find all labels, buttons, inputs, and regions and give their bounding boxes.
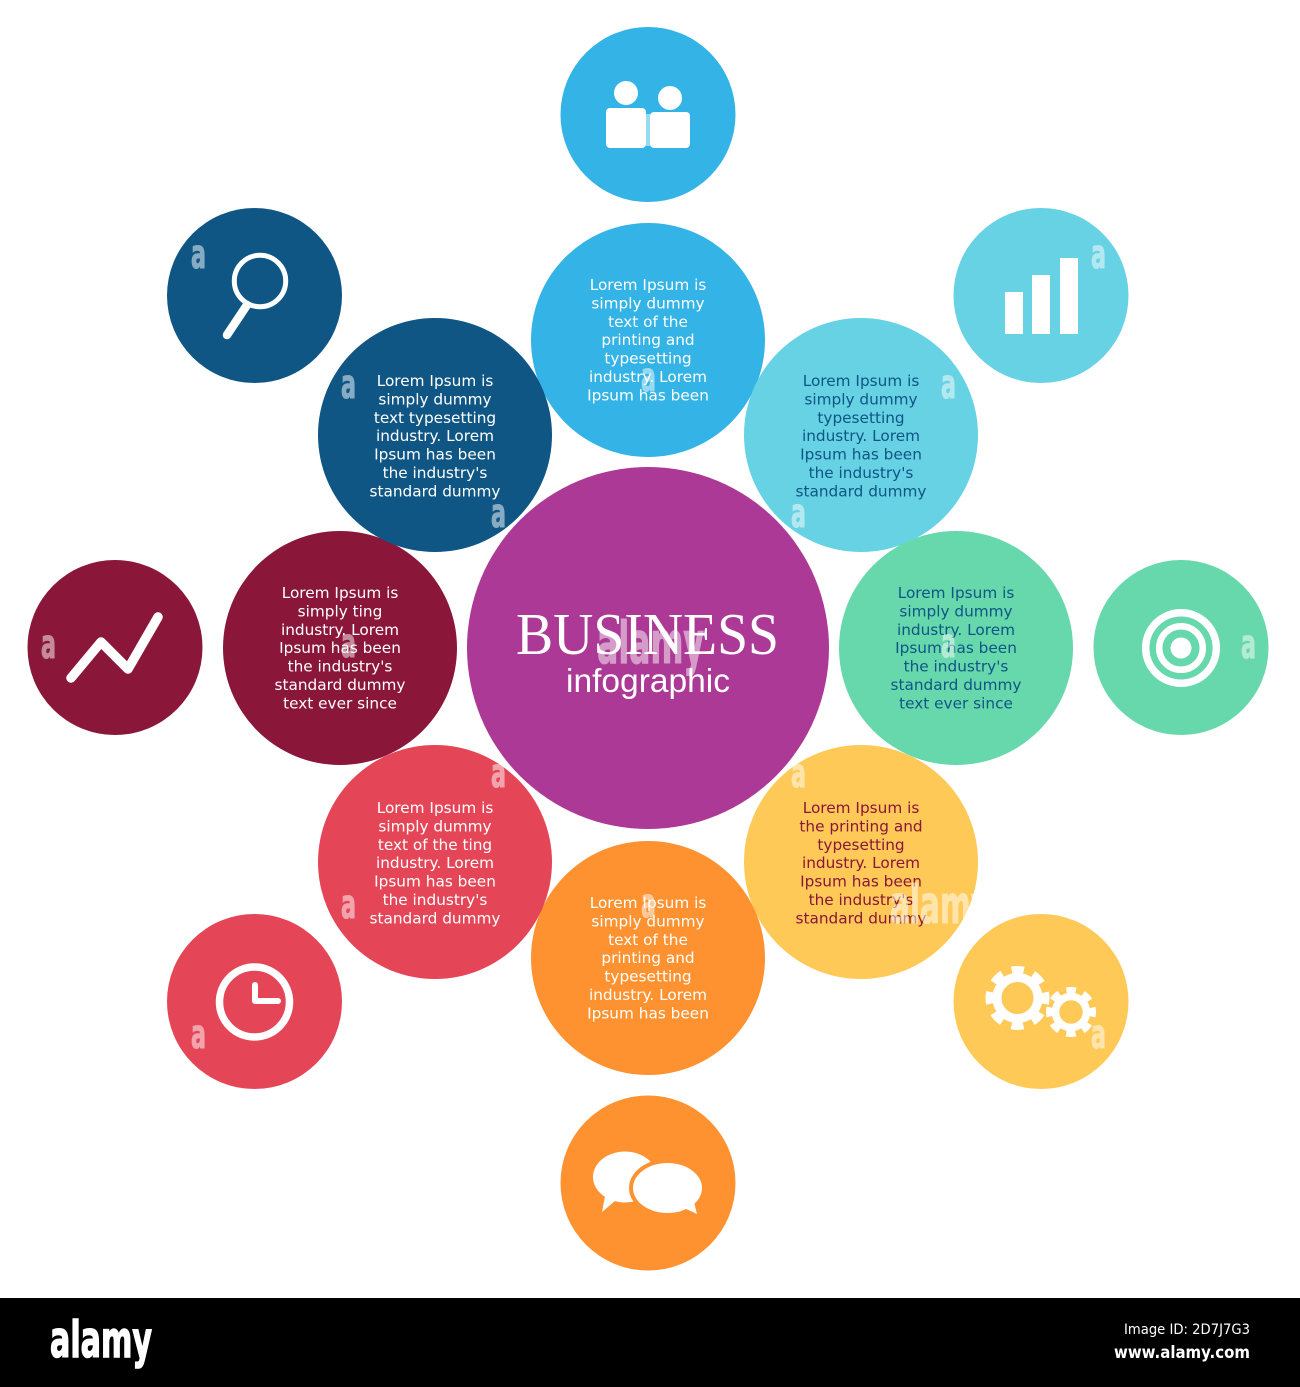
panel: left text circle: simply ting [298, 602, 382, 620]
panel: top-right text circle: typesetting [817, 409, 905, 427]
panel: bottom-right text circle: the printing and [799, 817, 923, 835]
icon: clock on red circle [167, 914, 342, 1089]
panel: right text circle: Ipsum has been [895, 639, 1017, 657]
panel: bottom-left text circle: Lorem Ipsum is [377, 799, 493, 817]
panel: bottom-left text circle: simply dummy [378, 817, 492, 835]
panel: bottom-right text circle: industry. Lorem [802, 854, 920, 872]
panel: top text circle: typesetting [604, 350, 692, 368]
footer band: www.alamy.com [1114, 1343, 1250, 1362]
watermark: alamy stamps: a [941, 621, 956, 667]
panel: central hub [467, 467, 829, 829]
icon: target on green circle [1094, 560, 1268, 735]
icon: chat bubbles on orange circle [560, 1096, 736, 1270]
footer band [0, 1298, 1300, 1387]
watermark: alamy stamps: a [791, 491, 806, 537]
panel: bottom text circle: industry. Lorem [589, 986, 707, 1004]
panel: right text circle: industry. Lorem [897, 621, 1015, 639]
panel: bottom-right text circle: Lorem Ipsum is [803, 799, 919, 817]
panel: bottom-left text circle: standard dummy [370, 909, 500, 927]
watermark: alamy stamps [41, 232, 1256, 1058]
panel: left text circle: text ever since [283, 694, 397, 712]
panel: bottom text circle: printing and [601, 949, 695, 967]
panel: bottom text circle: Lorem Ipsum is [590, 894, 706, 912]
watermark: alamy stamps: a [491, 751, 506, 797]
watermark: alamy stamps: alamy [890, 875, 990, 936]
panel: bottom-right text circle [744, 745, 978, 979]
panel: bottom-left text circle: text of the ting [378, 836, 492, 854]
panel: bottom text circle: simply dummy [591, 912, 705, 930]
panel: left text circle: industry. Lorem [281, 621, 399, 639]
panel: bottom text circle [531, 841, 765, 1075]
panel: bottom text circle: typesetting [604, 968, 692, 986]
panel: top text circle: text of the [608, 313, 688, 331]
watermark: alamy stamps: a [341, 882, 356, 928]
watermark: alamy stamps: a [191, 232, 206, 278]
icon: bar chart on cyan circle [954, 208, 1128, 383]
watermark: alamy stamps: a [491, 491, 506, 537]
watermark: alamy stamps: a [1091, 232, 1106, 278]
panel: top-right text circle: the industry's [809, 464, 913, 482]
watermark: alamy stamps: a [191, 1012, 206, 1058]
panel: left text circle: Ipsum has been [279, 639, 401, 657]
panel: bottom-left text circle [318, 745, 552, 979]
panel: central hub: infographic [566, 662, 730, 699]
footer band: alamy [50, 1311, 152, 1369]
panel: top-left text circle: standard dummy [370, 482, 500, 500]
panel: left text circle: standard dummy [275, 676, 405, 694]
panel: top text circle: simply dummy [591, 294, 705, 312]
panel: top-left text circle [318, 318, 552, 552]
panel: right text circle: simply dummy [899, 602, 1013, 620]
icon: magnifier on navy circle [167, 208, 342, 383]
panel: bottom-right text circle: the industry's [809, 891, 913, 909]
watermark: alamy stamps: a [791, 751, 806, 797]
panel: right text circle: Lorem Ipsum is [898, 584, 1014, 602]
panel: left text circle [223, 531, 457, 765]
watermark: alamy stamps: a [341, 362, 356, 408]
watermark: alamy stamps: a [1091, 1012, 1106, 1058]
panel: bottom-left text circle: industry. Lorem [376, 854, 494, 872]
watermark: alamy stamps: a [341, 621, 356, 667]
panel: top-left text circle: simply dummy [378, 390, 492, 408]
watermark: alamy stamps: a [641, 881, 656, 927]
panel: top-left text circle: text typesetting [374, 409, 496, 427]
panel: bottom-right text circle: typesetting [817, 836, 905, 854]
panel: central hub: BUSINESS [516, 601, 779, 667]
panel: bottom-right text circle: standard dummy [796, 909, 926, 927]
watermark: alamy stamps: alamy [597, 609, 704, 677]
panel: bottom text circle: Ipsum has been [587, 1004, 709, 1022]
watermark: alamy stamps: a [1241, 622, 1256, 668]
panel: top text circle: printing and [601, 331, 695, 349]
panel: top text circle [531, 223, 765, 457]
watermark: alamy stamps: a [641, 355, 656, 401]
panel: bottom-right text circle: Ipsum has been [800, 873, 922, 891]
panel: top-left text circle: Ipsum has been [374, 446, 496, 464]
icon: people on blue circle [560, 27, 736, 202]
panel: top text circle: Ipsum has been [587, 386, 709, 404]
icon: gears on yellow circle [954, 914, 1128, 1089]
panel: top-right text circle: standard dummy [796, 482, 926, 500]
panel: top-right text circle: simply dummy [804, 390, 918, 408]
panel: top text circle: industry. Lorem [589, 368, 707, 386]
panel: top-left text circle: industry. Lorem [376, 427, 494, 445]
footer band: Image ID: 2D7J7G3 [1124, 1322, 1250, 1338]
panel: bottom-left text circle: Ipsum has been [374, 873, 496, 891]
panel: top-right text circle: Lorem Ipsum is [803, 372, 919, 390]
panel: right text circle: the industry's [904, 658, 1008, 676]
panel: bottom text circle: text of the [608, 931, 688, 949]
panel: top-right text circle: Ipsum has been [800, 446, 922, 464]
panel: left text circle: the industry's [288, 658, 392, 676]
panel: top text circle: Lorem Ipsum is [590, 276, 706, 294]
panel: right text circle: standard dummy [891, 676, 1021, 694]
watermark: alamy stamps: a [41, 622, 56, 668]
panel: top-right text circle: industry. Lorem [802, 427, 920, 445]
panel: top-left text circle: the industry's [383, 464, 487, 482]
panel: right text circle [839, 531, 1073, 765]
panel: right text circle: text ever since [899, 694, 1013, 712]
icon: trend line on maroon circle [28, 560, 202, 735]
panel: top-left text circle: Lorem Ipsum is [377, 372, 493, 390]
panel: top-right text circle [744, 318, 978, 552]
panel: bottom-left text circle: the industry's [383, 891, 487, 909]
watermark: alamy stamps: a [941, 362, 956, 408]
panel: left text circle: Lorem Ipsum is [282, 584, 398, 602]
